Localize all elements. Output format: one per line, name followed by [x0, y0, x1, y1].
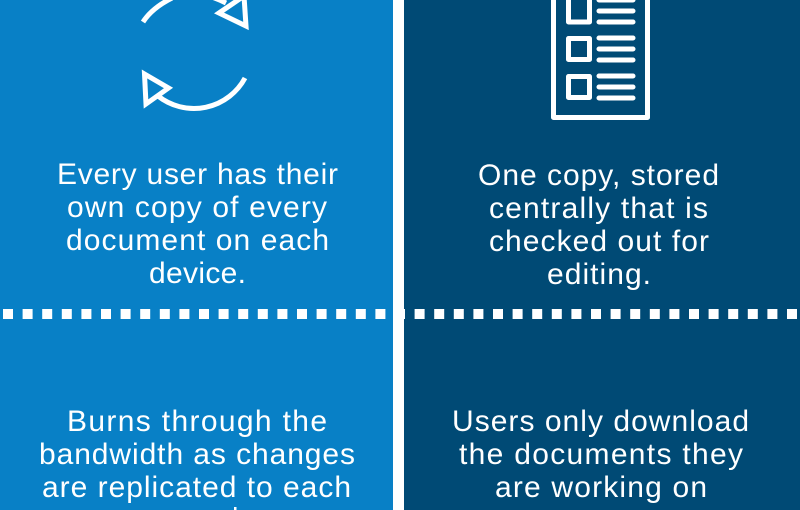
text: left bandwidth note: bandwidth as changes [39, 438, 355, 471]
text: right description [478, 159, 719, 291]
text: right description: checked out for [489, 225, 709, 258]
text: left description: document on each [66, 224, 329, 257]
text: right bandwidth note: Users only download [452, 405, 749, 438]
text: left bandwidth note: are replicated to each [42, 471, 351, 504]
text: left bandwidth note [39, 405, 355, 504]
text: right bandwidth note: are working on [495, 471, 707, 504]
text: right description: centrally that is [489, 192, 708, 225]
icon: checklist document [554, 0, 648, 118]
text: right bandwidth note [452, 405, 749, 504]
text: left description: device. [149, 257, 246, 290]
icon: sync arrows [143, 0, 246, 108]
text: left bandwidth note: Burns through the [67, 405, 327, 438]
dotted divider [3, 309, 797, 319]
text: left description: Every user has their [57, 158, 338, 191]
text: right description: One copy, stored [478, 159, 719, 192]
clipped tip of a letter from the cut-off next line [234, 507, 236, 510]
text: left description [57, 158, 338, 290]
panel: right column background [404, 0, 800, 510]
text: right bandwidth note: the documents they [459, 438, 743, 471]
panel: left column background [0, 0, 393, 510]
text: right description: editing. [547, 258, 651, 291]
text: left description: own copy of every [67, 191, 327, 224]
